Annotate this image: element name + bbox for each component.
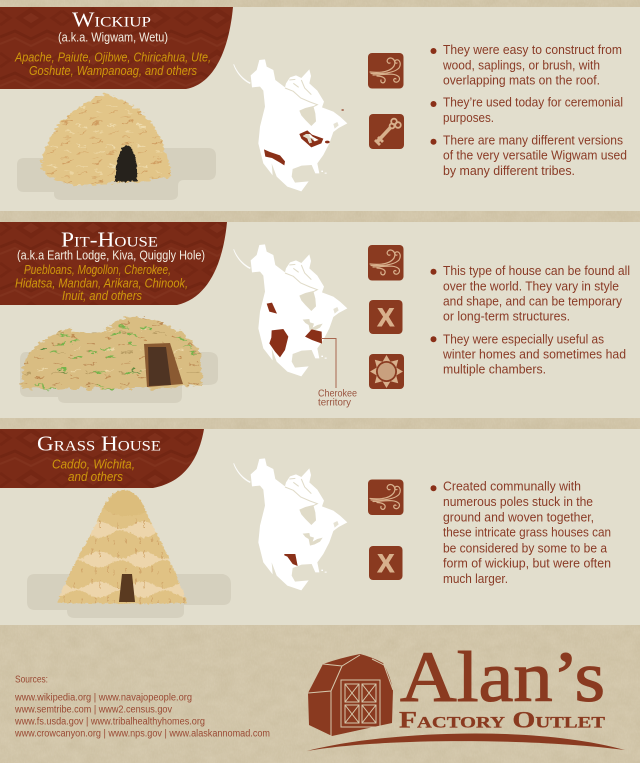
tribes list: Goshute, Wampanoag, and others	[29, 63, 197, 78]
panel: pit-house	[0, 222, 640, 418]
icon: x: X	[377, 304, 394, 332]
bullet list: wickiup facts: purposes.	[443, 110, 494, 125]
bullet list: pit-house facts: They were especially useful as	[443, 331, 604, 346]
icon: skeleton key	[369, 114, 404, 149]
bullet list: wickiup facts: overlapping mats on the roof.	[443, 73, 600, 88]
sources	[14, 675, 270, 740]
icon: wind	[368, 245, 404, 280]
bullet list: grass house facts: numerous poles stuck in the	[443, 494, 593, 509]
banner: wickiup	[0, 7, 233, 89]
callout: cherokee territory	[318, 338, 357, 408]
bullet list: grass house facts: Created communally with	[443, 479, 581, 494]
sources: www.wikipedia.org | www.navajopeople.org	[14, 693, 192, 704]
tribes list	[15, 262, 188, 303]
callout: cherokee territory: territory	[318, 398, 351, 408]
bullet list: wickiup facts: by many different tribes.	[443, 163, 575, 178]
panel: wickiup	[0, 7, 640, 211]
icon: wind	[368, 480, 404, 515]
title: wickiup: Wickiup	[72, 8, 151, 32]
logo: alan's factory outlet	[307, 637, 625, 751]
illustration: wickiup hut	[17, 94, 216, 200]
icon: sun	[369, 354, 404, 389]
bullet list: grass house facts: form of wickiup, but were often	[443, 556, 611, 571]
title: pit-house: Pit-House	[61, 228, 158, 252]
map: wickiup range	[233, 59, 347, 191]
tribes list: Caddo, Wichita,	[52, 456, 135, 471]
bullet list: pit-house facts: winter homes and sometimes had	[442, 347, 626, 362]
bullet list: wickiup facts: There are many different versions	[443, 132, 623, 147]
bullet list: pit-house facts: This type of house can be found all	[443, 263, 630, 278]
icon: x: X	[377, 550, 394, 578]
bullet list: wickiup facts	[430, 42, 627, 178]
sources: www.crowcanyon.org | www.nps.gov | www.alaskannomad.com	[14, 729, 270, 740]
illustration: grass house	[27, 490, 231, 618]
bullet list: wickiup facts: They’re used today for ceremonial	[443, 95, 623, 110]
wordmark: alan's: Alan’s	[400, 637, 605, 717]
illustration: pit-house	[20, 317, 218, 403]
bullet list: pit-house facts: or long-term structures.	[443, 309, 570, 324]
icon: x	[369, 546, 402, 580]
bullet list: pit-house facts: multiple chambers.	[443, 361, 546, 376]
panel: grass house	[0, 429, 640, 625]
bullet list: grass house facts: these intricate grass houses can	[443, 525, 611, 540]
wordmark: factory outlet: Factory Outlet	[399, 708, 605, 733]
bullet list: wickiup facts: wood, saplings, or brush, with	[442, 57, 600, 72]
banner: pit-house	[0, 222, 227, 305]
tribes list: and others	[68, 469, 123, 484]
tribes list: Apache, Paiute, Ojibwe, Chiricahua, Ute,	[14, 50, 211, 65]
bullet list: grass house facts: ground and woven together,	[443, 510, 594, 525]
sources: www.semtribe.com | www2.census.gov	[14, 705, 172, 716]
bullet list: wickiup facts: of the very versatile Wigwam used	[443, 148, 627, 163]
banner: grass house	[0, 429, 204, 488]
title: grass house: Grass House	[37, 432, 161, 456]
sources: Sources:	[15, 675, 48, 686]
aka names: (a.k.a. Wigwam, Wetu)	[58, 31, 168, 45]
tribes list: Inuit, and others	[62, 288, 142, 303]
tribes list	[14, 50, 211, 78]
tribes list: Hidatsa, Mandan, Arikara, Chinook,	[15, 275, 188, 290]
map: pit-house range	[233, 244, 347, 376]
icon: barn	[308, 654, 393, 736]
bullet list: grass house facts: much larger.	[443, 571, 508, 586]
bullet list: grass house facts	[430, 479, 611, 586]
bullet list: pit-house facts: and shape, and can be temporary	[443, 294, 622, 309]
aka names: (a.k.a Earth Lodge, Kiva, Quiggly Hole)	[17, 248, 205, 262]
tribes list: Puebloans, Mogollon, Cherokee,	[24, 262, 171, 277]
swoosh	[307, 733, 625, 751]
bullet list: grass house facts: be considered by some to be a	[443, 540, 608, 555]
icon: wind	[368, 53, 404, 88]
tribes list	[52, 456, 135, 484]
icon: x	[369, 300, 402, 334]
bullet list: pit-house facts	[430, 263, 630, 376]
map: grass house range	[233, 458, 347, 590]
callout: cherokee territory: Cherokee	[318, 389, 357, 400]
bullet list: wickiup facts: They were easy to construct from	[443, 42, 622, 57]
sources: www.fs.usda.gov | www.tribalhealthyhomes.org	[14, 717, 205, 728]
bullet list: pit-house facts: over the world. They vary in style	[443, 278, 619, 293]
